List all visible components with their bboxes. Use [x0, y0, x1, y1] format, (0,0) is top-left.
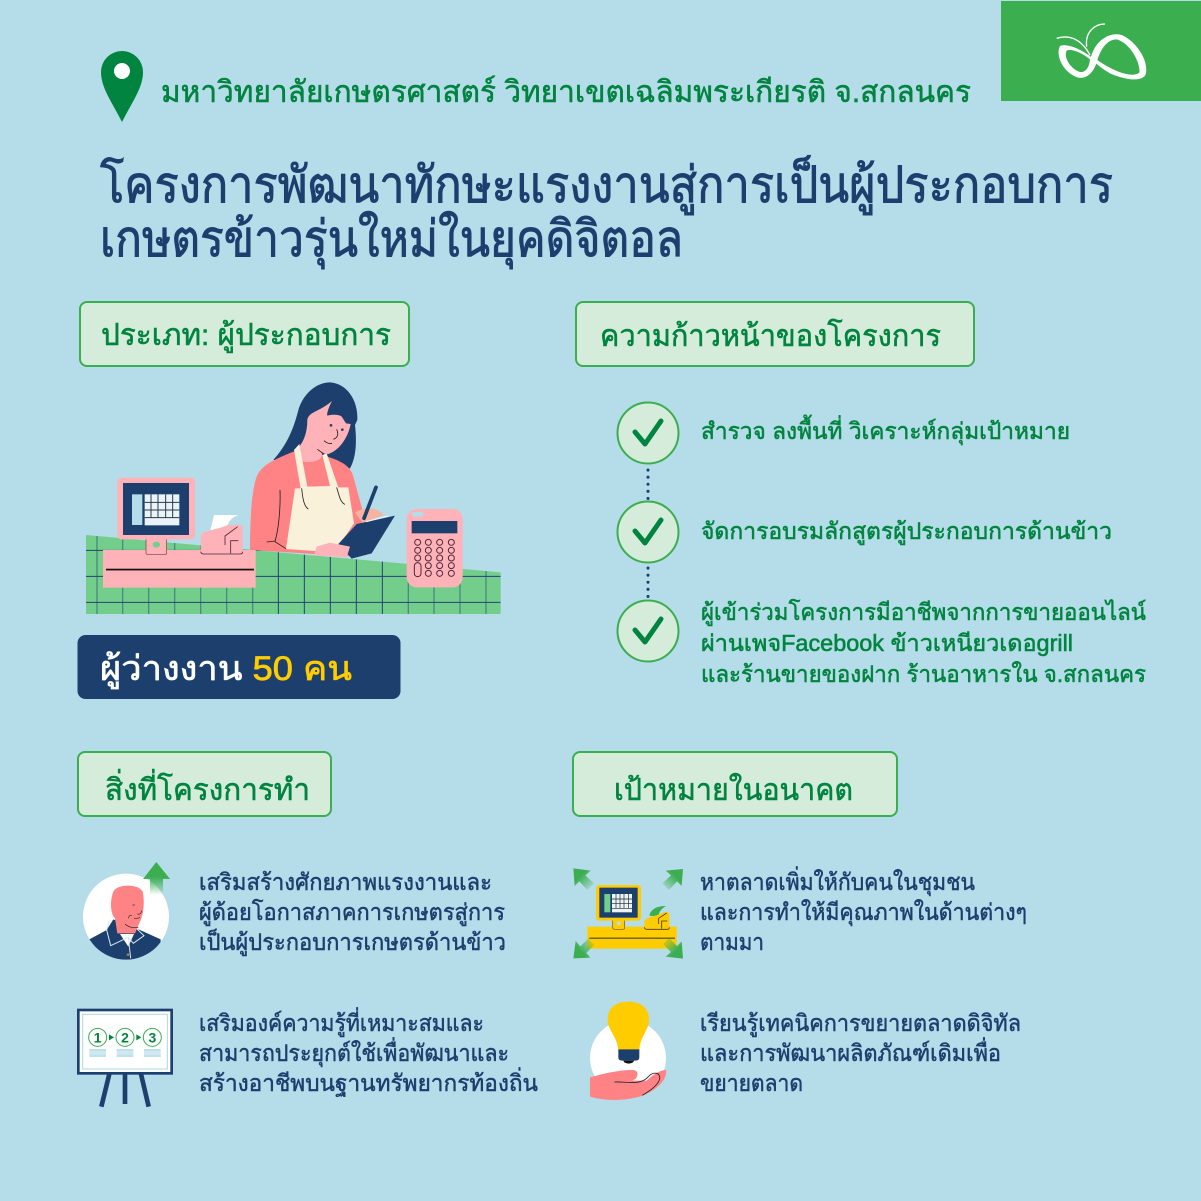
counter — [103, 550, 256, 588]
logo panel — [1001, 1, 1201, 101]
icon: worker with up arrow — [83, 862, 170, 963]
calculator — [407, 509, 463, 587]
title: เกษตรข้าวรุ่นใหม่ในยุคดิจิตอล — [100, 211, 683, 269]
step 3: ผ่านเพจFacebook ข้าวเหนียวเดอgrill — [701, 630, 1073, 656]
step 3 — [618, 599, 1146, 687]
ground with grid — [83, 530, 503, 617]
receipt printer — [201, 515, 243, 554]
text: find more markets: หาตลาดเพิ่มให้กับคนในชุมชน — [700, 866, 975, 896]
heading: type: ประเภท: ผู้ประกอบการ — [101, 319, 391, 353]
text: build workforce capacity — [199, 869, 506, 956]
monitor — [117, 478, 195, 554]
callout: unemployed count: ผู้ว่างงาน 50 คน — [100, 650, 352, 689]
heading: what the project does: สิ่งที่โครงการทำ — [105, 769, 310, 807]
text: find more markets: ตามมา — [700, 929, 764, 955]
university name: มหาวิทยาลัยเกษตรศาสตร์ วิทยาเขตเฉลิมพระเกียรติ จ.สกลนคร — [161, 75, 971, 109]
heading: progress: ความก้าวหน้าของโครงการ — [600, 318, 941, 353]
progress timeline — [618, 402, 1146, 687]
heading: future goals — [573, 752, 897, 816]
step 2 — [618, 502, 1112, 562]
icon: presentation board: 2 — [121, 1029, 129, 1045]
text: learn digital marketing: และการพัฒนาผลิตภัณฑ์เดิมเพื่อ — [700, 1037, 1001, 1066]
text: suitable knowledge: สามารถประยุกต์ใช้เพื่อพัฒนาและ — [199, 1037, 509, 1067]
text: suitable knowledge: เสริมองค์ความรู้ที่เหมาะสมและ — [199, 1007, 484, 1037]
text: build workforce capacity: ผู้ด้อยโอกาสภาคการเกษตรสู่การ — [199, 899, 505, 926]
step 3: ผู้เข้าร่วมโครงการมีอาชีพจากการขายออนไลน์ — [701, 599, 1146, 626]
heading: type — [80, 302, 409, 366]
icon: location pin — [101, 51, 143, 122]
icon: presentation board — [78, 1010, 172, 1107]
step 3: และร้านขายของฝาก ร้านอาหารใน จ.สกลนคร — [701, 661, 1146, 687]
step 1: สำรวจ ลงพื้นที่ วิเคราะห์กลุ่มเป้าหมาย — [701, 415, 1070, 445]
woman — [250, 382, 395, 559]
text: build workforce capacity: เป็นผู้ประกอบการเกษตรด้านข้าว — [199, 927, 506, 956]
text: learn digital marketing: ขยายตลาด — [700, 1070, 803, 1096]
illustration: woman at cash counter — [83, 382, 503, 617]
title — [100, 155, 1113, 269]
text: find more markets: และการทำให้มีคุณภาพในด้านต่างๆ — [700, 899, 1027, 926]
icon: light bulb over hand — [590, 1002, 666, 1100]
step 2: จัดการอบรมลักสูตรผู้ประกอบการด้านข้าว — [701, 518, 1112, 545]
icon: presentation board: 1 — [94, 1029, 102, 1045]
step 1 — [618, 402, 1070, 464]
callout: unemployed count — [78, 635, 400, 699]
icon: cash counter with expanding arrows — [573, 868, 683, 959]
text: suitable knowledge — [199, 1007, 538, 1097]
heading: what the project does — [78, 752, 331, 816]
heading: future goals: เป้าหมายในอนาคต — [614, 773, 853, 807]
text: find more markets — [700, 866, 1027, 955]
text: learn digital marketing — [700, 1010, 1021, 1096]
title: โครงการพัฒนาทักษะแรงงานสู่การเป็นผู้ประกอบการ — [100, 155, 1113, 215]
heading: progress — [576, 302, 974, 366]
text: suitable knowledge: สร้างอาชีพบนฐานทรัพยากรท้องถิ่น — [199, 1067, 538, 1097]
text: learn digital marketing: เรียนรู้เทคนิคการขยายตลาดดิจิทัล — [700, 1010, 1021, 1037]
icon: presentation board: 3 — [148, 1029, 156, 1045]
text: build workforce capacity: เสริมสร้างศักยภาพแรงงานและ — [199, 869, 492, 895]
